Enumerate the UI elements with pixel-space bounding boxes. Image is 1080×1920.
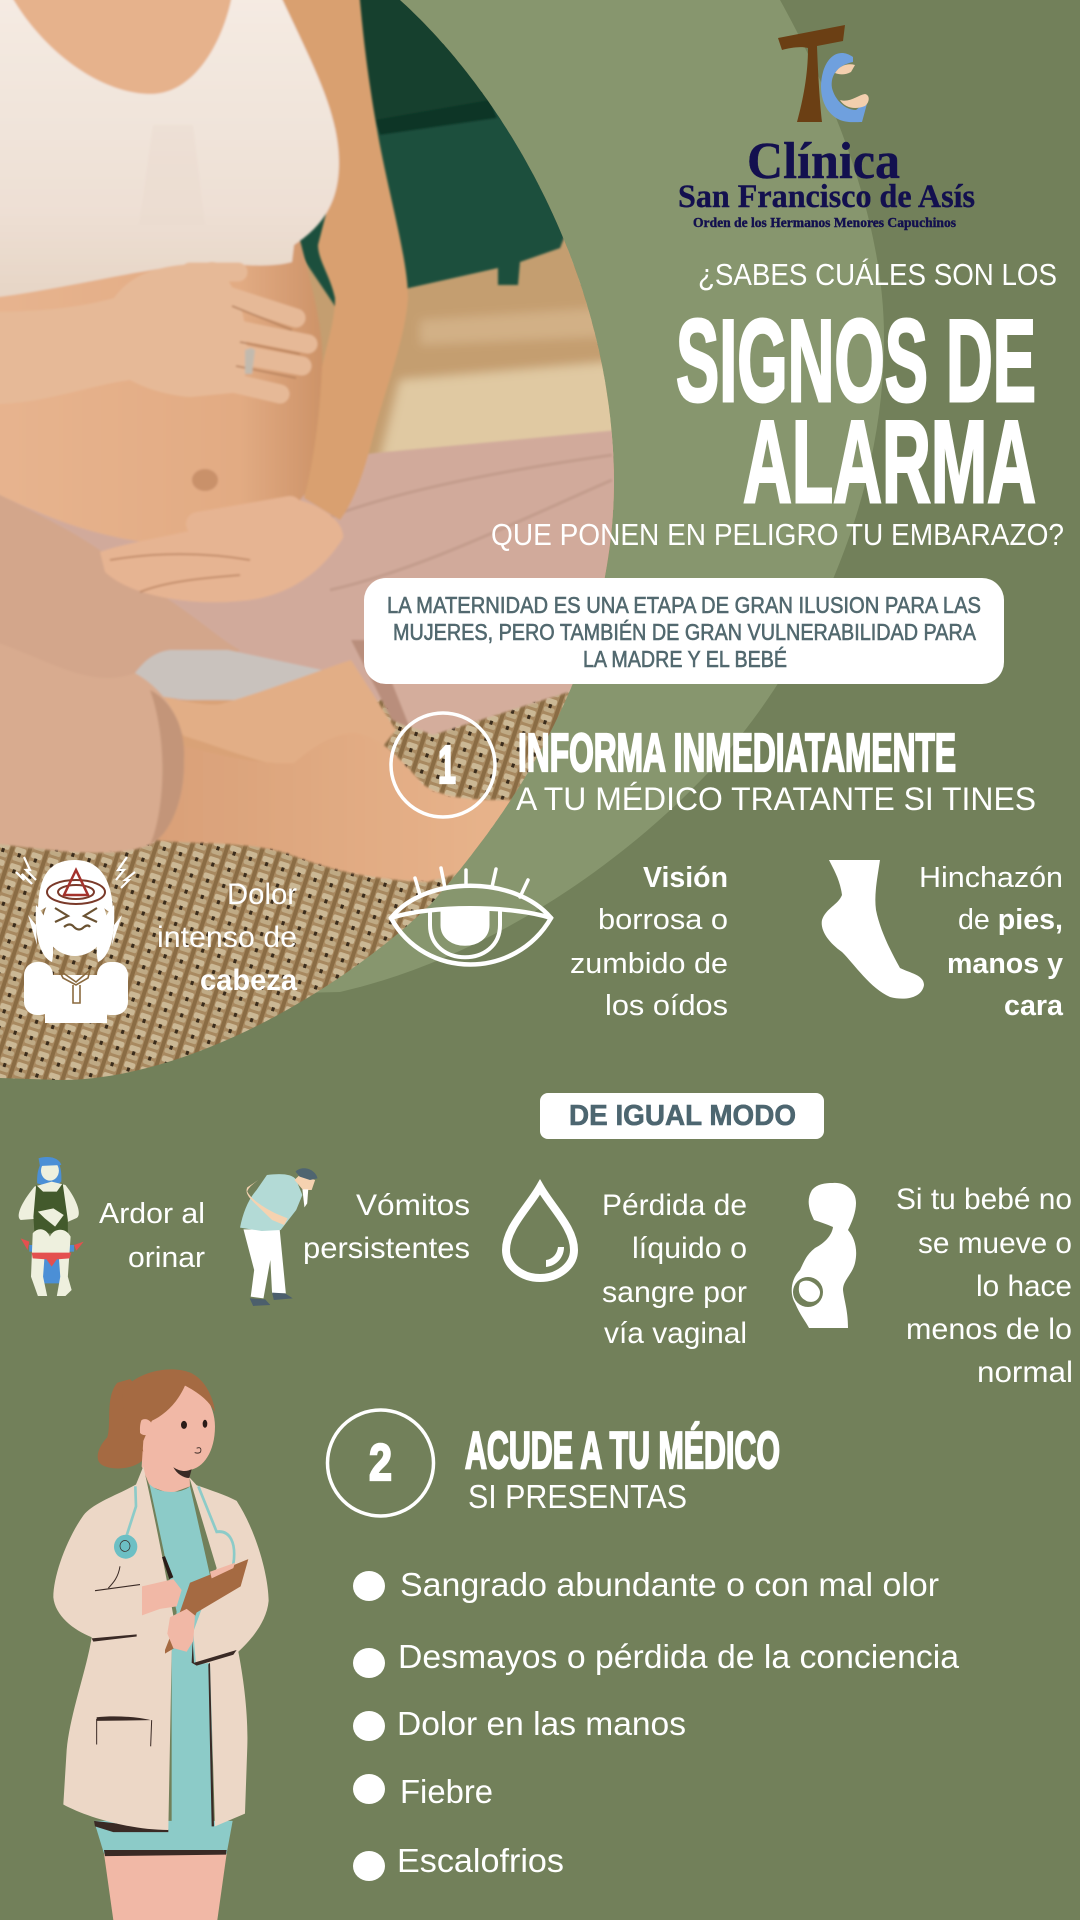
text: headache: Dolor [227,878,297,911]
step 2 heading: SI PRESENTAS [468,1478,687,1515]
writing hand and pen [142,1579,182,1615]
item: chills: Escalofrios [397,1842,564,1879]
checklist [353,1566,960,1881]
intro card: LA MADRE Y EL BEBÉ [583,646,787,672]
text: blurred vision: Visión [643,862,728,894]
text: fluid loss: sangre por [602,1276,747,1309]
text: persistent vomiting [303,1189,470,1265]
ring [245,348,255,374]
text: blurred vision: borrosa o [598,904,728,936]
step 2 number badge [328,1410,434,1516]
logo subtitle: San Francisco de Asís [678,179,975,215]
body [0,0,640,882]
step 2 heading: ACUDE A TU MÉDICO [465,1422,780,1480]
top hand [0,264,247,404]
logo: Clínica San Francisco de Asís [678,25,975,230]
illustration: doctor [53,1369,269,1920]
holding hand [167,1609,195,1652]
neck and face [142,1384,215,1494]
clipboard [165,1559,248,1654]
item: fainting: Desmayos o pérdida de la conciencia [398,1638,960,1675]
text: headache [157,878,297,997]
step 1 heading: A TU MÉDICO TRATANTE SI TINES [516,781,1036,817]
intro card: LA MATERNIDAD ES UNA ETAPA DE GRAN ILUSION PARA LAS [387,592,981,618]
dress [149,1484,213,1830]
text: burning urination: orinar [128,1242,205,1274]
pillow [135,650,322,705]
left cuff [0,674,163,854]
text: swelling: de pies, [958,904,1063,936]
title block [491,257,1064,552]
icon: foot [822,860,924,999]
coat left [53,1466,173,1830]
lower leg [155,733,514,882]
step 2 heading [465,1422,780,1515]
text: fluid loss [602,1189,747,1350]
icon: pregnant silhouette [792,1183,856,1328]
text: baby movement: lo hace [976,1270,1072,1303]
step 2 number badge: 2 [369,1434,392,1492]
legs [104,1854,227,1920]
bra [0,0,339,298]
stethoscope [127,1486,234,1565]
light green curved panel [0,0,884,1000]
text: burning urination: Ardor al [99,1198,205,1230]
badge: de igual modo: DE IGUAL MODO [569,1100,796,1132]
item: fever [353,1773,493,1810]
text: baby movement: normal [977,1356,1073,1389]
text: swelling: cara [1004,990,1064,1022]
text: fluid loss: vía vaginal [604,1317,747,1350]
item: bleeding: Sangrado abundante o con mal olor [400,1566,939,1603]
step 1 heading [516,723,1036,817]
sofa [294,0,575,306]
belly [17,240,322,541]
step 1 number badge: 1 [438,735,456,795]
icon: woman on toilet [19,1157,84,1296]
blurred room [306,196,614,572]
text: persistent vomiting: persistentes [303,1232,470,1265]
step 1 number badge [391,713,495,817]
text: baby movement: menos de lo [906,1313,1072,1346]
navel [192,469,218,491]
chest [0,0,240,130]
text: blurred vision: los oídos [605,990,728,1022]
text: headache: cabeza [200,964,297,997]
item: fever: Fiebre [400,1773,493,1810]
text: persistent vomiting: Vómitos [356,1189,470,1222]
text: fluid loss: líquido o [632,1232,747,1265]
logo order line: Orden de los Hermanos Menores Capuchinos [693,215,956,230]
upper foot [165,660,396,763]
coat creases [92,1634,237,1826]
logo wordmark: Clínica [747,133,900,190]
text: headache: intenso de [157,921,297,954]
text: swelling [919,862,1064,1022]
text: blurred vision: zumbido de [570,948,728,980]
icon: tau cross [778,25,845,122]
right arm [278,0,408,520]
photo: pregnant woman [0,0,640,1085]
lower hand [100,498,343,602]
intro card: MUJERES, PERO TAMBIÉN DE GRAN VULNERABILIDAD PARA [393,619,977,645]
text: burning urination [99,1198,205,1274]
eyes [181,1421,187,1429]
shadow under chin [173,1467,192,1478]
text: swelling: Hinchazón [919,862,1063,894]
intro card [364,578,1004,684]
text: fluid loss: Pérdida de [602,1189,747,1222]
text: swelling: manos y [947,948,1063,980]
pants base [0,428,640,720]
icon: eye [391,868,551,964]
right cuff [397,684,572,734]
text: baby movement: Si tu bebé no [896,1183,1072,1216]
skirt [94,1821,233,1854]
text: baby movement: se mueve o [918,1227,1072,1260]
hair back [98,1379,163,1469]
icon: mother and child [821,53,869,122]
text: baby movement [896,1183,1073,1389]
text: blurred vision [570,862,728,1022]
badge: de igual modo [540,1093,824,1139]
icon: drop [506,1187,574,1278]
icon: headache [16,857,135,1023]
skin patch between legs [182,699,262,762]
item: hand pain: Dolor en las manos [397,1705,686,1742]
coat right [189,1477,269,1826]
icon: person vomiting [240,1168,318,1306]
hair top [123,1369,215,1452]
